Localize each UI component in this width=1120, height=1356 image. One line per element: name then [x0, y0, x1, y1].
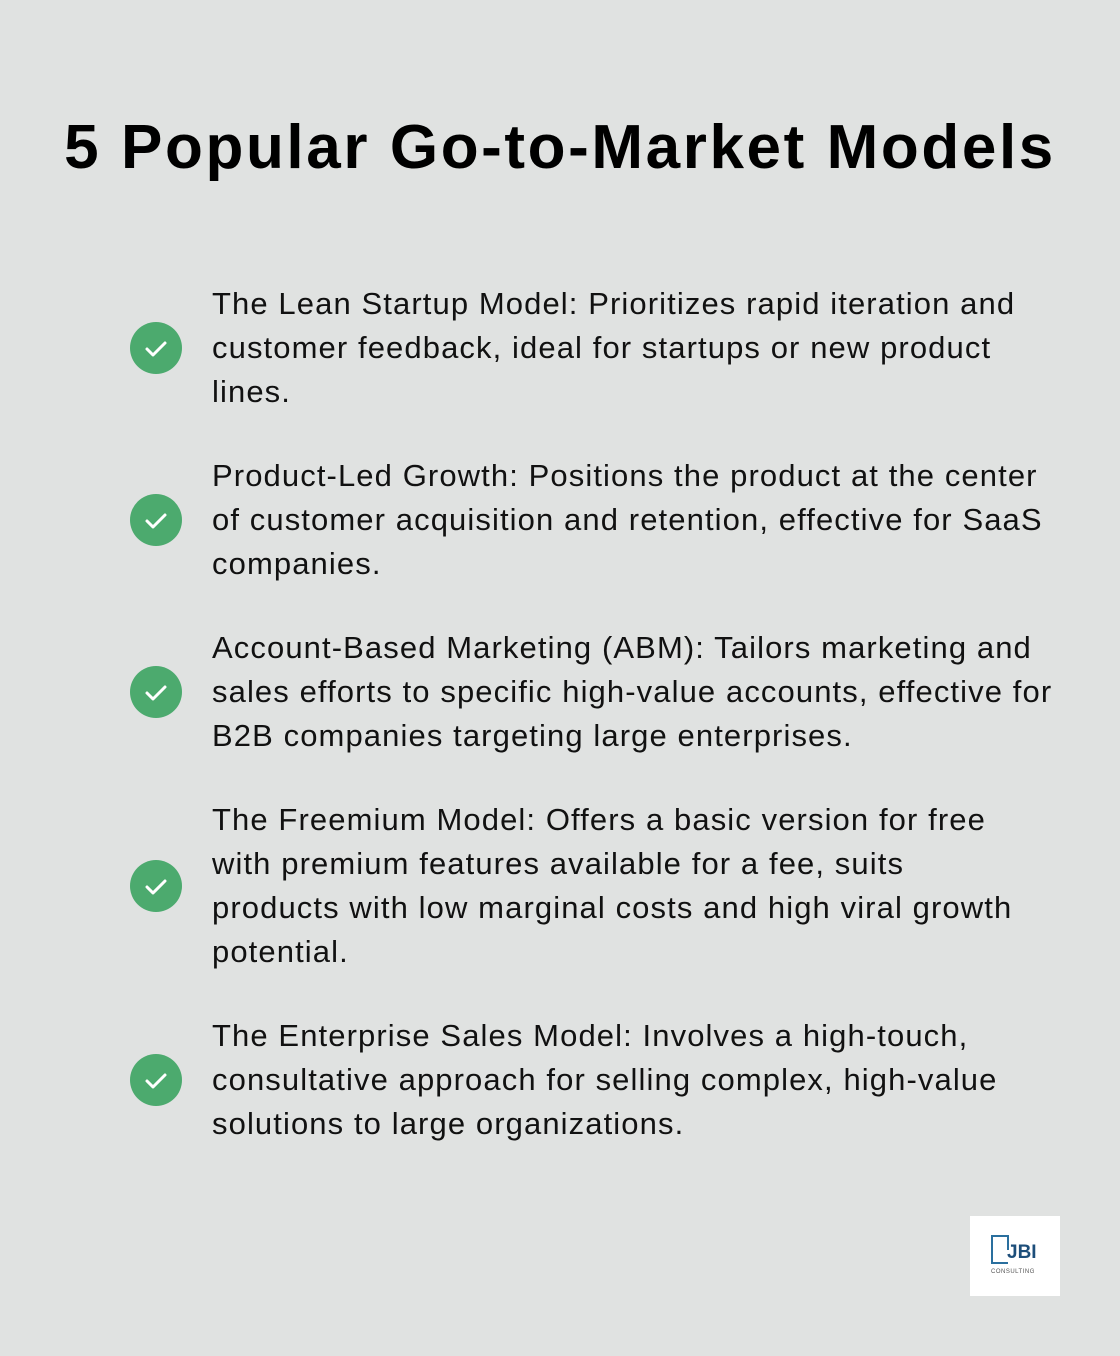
text — [212, 1018, 997, 1141]
text — [212, 630, 1052, 753]
icon: check — [130, 322, 182, 374]
text — [212, 458, 1043, 581]
text: lines. — [212, 374, 291, 409]
text: solutions to large organizations. — [212, 1106, 684, 1141]
text: Product-Led Growth: Positions the product at the center — [212, 458, 1038, 493]
item: product-led growth — [130, 458, 1043, 581]
text: B2B companies targeting large enterprises. — [212, 718, 853, 753]
icon: check — [130, 1054, 182, 1106]
item: lean startup — [130, 286, 1015, 409]
text: customer feedback, ideal for startups or new product — [212, 330, 991, 365]
text: consultative approach for selling complex, high-value — [212, 1062, 997, 1097]
logo: JBI consulting: CONSULTING — [991, 1269, 1035, 1275]
text: Account-Based Marketing (ABM): Tailors marketing and — [212, 630, 1032, 665]
item: freemium — [130, 802, 1012, 969]
text: of customer acquisition and retention, effective for SaaS — [212, 502, 1043, 537]
text: companies. — [212, 546, 382, 581]
text: The Lean Startup Model: Prioritizes rapid iteration and — [212, 286, 1015, 321]
text: The Enterprise Sales Model: Involves a high-touch, — [212, 1018, 968, 1053]
text: with premium features available for a fee, suits — [212, 846, 904, 881]
text: products with low marginal costs and high viral growth — [212, 890, 1012, 925]
item: ABM — [130, 630, 1052, 753]
text — [212, 802, 1012, 969]
icon: check — [130, 666, 182, 718]
item: enterprise sales — [130, 1018, 997, 1141]
icon: check — [130, 860, 182, 912]
logo: JBI consulting — [970, 1216, 1060, 1296]
text — [212, 286, 1015, 409]
logo: JBI consulting: JBI — [1007, 1242, 1037, 1263]
icon: check — [130, 494, 182, 546]
title: 5 Popular Go-to-Market Models — [64, 113, 1056, 182]
text: sales efforts to specific high-value accounts, effective for — [212, 674, 1052, 709]
text: potential. — [212, 934, 349, 969]
text: The Freemium Model: Offers a basic version for free — [212, 802, 986, 837]
